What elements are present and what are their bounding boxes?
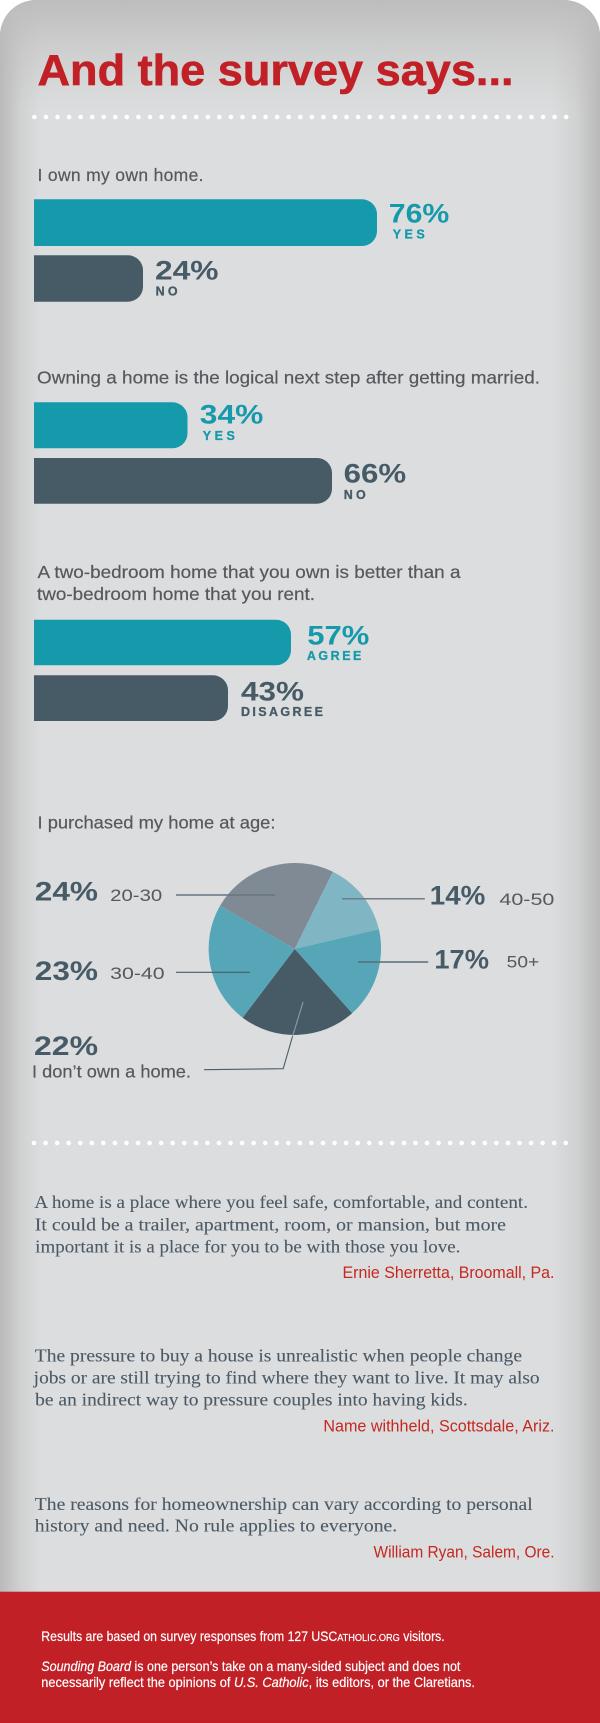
value: 43%: 43% [241, 676, 304, 706]
footer note: disclaimer: necessarily reflect the opinions of U.S. Catholic, its editors, or the Claretians. [41, 1674, 475, 1690]
footer note: survey source: Results are based on survey responses from 127 USCATHOLIC.ORG visitors. [41, 1628, 445, 1644]
label: no home: I don’t own a home. [32, 1062, 191, 1082]
slice: 40-50 [295, 872, 379, 949]
question text: A two-bedroom home that you own is better than a [38, 562, 461, 582]
bar: yes 34% [34, 402, 188, 448]
question text: Owning a home is the logical next step after getting married. [37, 367, 540, 387]
panel: question 3 [34, 562, 461, 721]
panel: quote 3 [35, 1494, 555, 1561]
bar: no 24% [34, 255, 143, 302]
panel: question 1 [34, 165, 449, 302]
value: 57%: 57% [307, 621, 369, 651]
quote text [33, 1346, 540, 1410]
leader: 40-50 [342, 898, 425, 900]
title: And the survey says... [38, 46, 514, 95]
quote text [35, 1494, 533, 1536]
age: 40-50: 40-50 [499, 891, 554, 909]
leader: no home [204, 1002, 303, 1070]
value: 14%: 14% [430, 881, 485, 911]
leader: 50+ [358, 961, 428, 963]
age: 20-30: 20-30 [110, 887, 162, 905]
value: 34%: 34% [200, 399, 263, 429]
value: 17%: 17% [434, 944, 489, 974]
slice: 30-40 [209, 906, 295, 1018]
value: 76%: 76% [389, 199, 449, 229]
panel: quote 1 [34, 1192, 554, 1282]
panel: question 2 [34, 367, 540, 504]
label: yes: YES [203, 429, 235, 443]
panel: footer [0, 1592, 600, 1723]
age: 30-40: 30-40 [110, 965, 165, 983]
bar: agree 57% [34, 620, 291, 665]
quote text: The pressure to buy a house is unrealistic when people change [35, 1346, 522, 1366]
bar: disagree 43% [34, 675, 228, 721]
label: disagree: DISAGREE [241, 705, 323, 719]
bar: yes 76% [34, 199, 377, 246]
quote text [34, 1192, 528, 1257]
question text: I own my own home. [38, 165, 204, 185]
question text [37, 562, 461, 604]
label: yes: YES [393, 228, 425, 242]
quote text: jobs or are still trying to find where they want to live. It may also [33, 1368, 540, 1388]
quote text: be an indirect way to pressure couples into having kids. [35, 1390, 468, 1410]
value: 22%: 22% [34, 1031, 98, 1061]
value: 24%: 24% [35, 877, 98, 907]
attribution: Ernie Sherretta, Broomall, Pa. [342, 1264, 554, 1282]
slice: 50+ [295, 929, 381, 1013]
quote text: It could be a trailer, apartment, room, or mansion, but more [35, 1214, 506, 1234]
question text: two-bedroom home that you rent. [37, 584, 315, 604]
value: 24%: 24% [155, 255, 218, 285]
quote text: A home is a place where you feel safe, comfortable, and content. [34, 1192, 528, 1212]
label: no: NO [344, 488, 366, 502]
question text: I purchased my home at age: [38, 812, 276, 832]
age: 50+: 50+ [507, 954, 539, 972]
bar: no 66% [34, 458, 332, 504]
quote text: The reasons for homeownership can vary according to personal [35, 1494, 533, 1514]
leader: 30-40 [176, 971, 250, 973]
attribution: William Ryan, Salem, Ore. [374, 1543, 554, 1561]
value: 66%: 66% [344, 459, 406, 489]
panel: age pie section [32, 812, 554, 1082]
attribution: Name withheld, Scottsdale, Ariz. [323, 1417, 554, 1435]
footer note: disclaimer [41, 1658, 475, 1690]
footer note: disclaimer: Sounding Board is one person’s take on a many-sided subject and does not [41, 1658, 460, 1674]
quote text: important it is a place for you to be with those you love. [35, 1237, 460, 1257]
label: no: NO [156, 285, 178, 299]
value: 23%: 23% [35, 956, 98, 986]
label: agree: AGREE [307, 649, 361, 663]
leader: 20-30 [176, 894, 275, 896]
slice: no home [243, 949, 352, 1035]
quote text: history and need. No rule applies to everyone. [35, 1516, 397, 1536]
pie chart [209, 863, 381, 1035]
slice: 20-30 [220, 863, 333, 949]
panel: quote 2 [33, 1346, 555, 1435]
